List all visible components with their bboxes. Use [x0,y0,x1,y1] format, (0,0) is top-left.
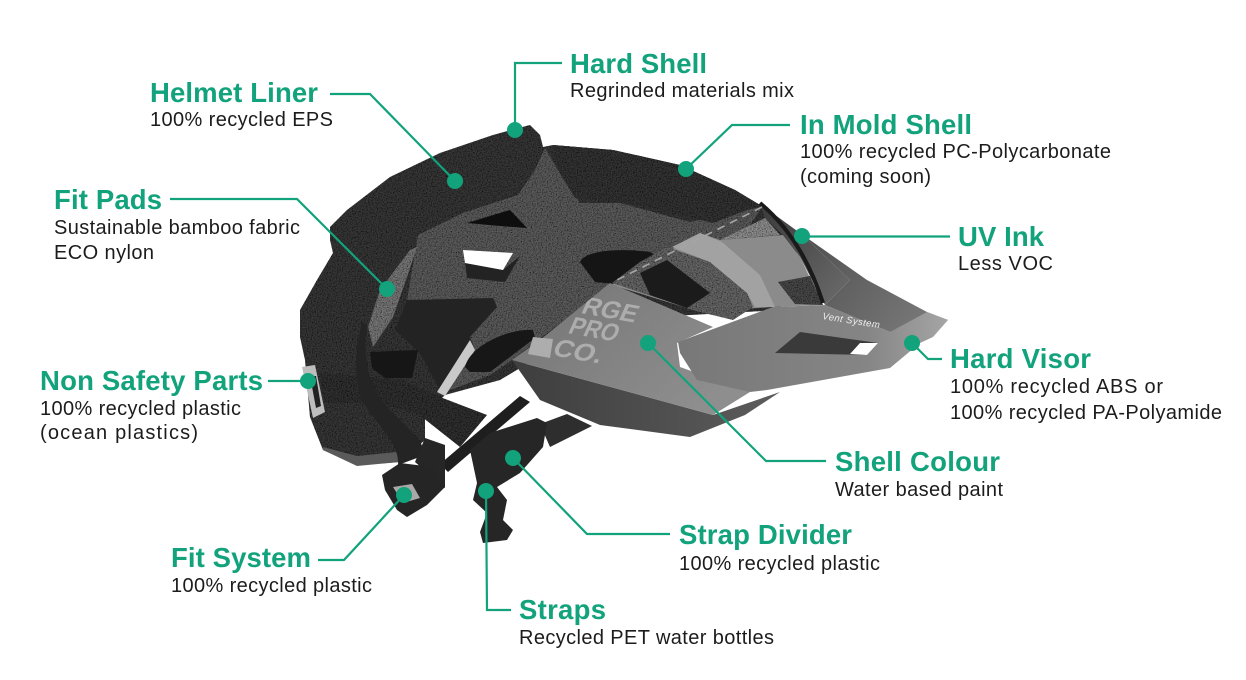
dashed cut line [615,207,762,281]
dot [379,281,395,297]
callout: Fit System [171,487,412,597]
visor inner window [760,204,850,305]
dot [505,450,521,466]
leader line [802,235,950,238]
through vent dark [465,256,520,282]
shell graphic lettering [554,298,640,363]
rear adjuster cable [356,322,425,465]
fit bracket [415,438,445,488]
dot [640,335,656,351]
helmet rear and liner body [300,125,800,465]
foam patch right [778,276,823,305]
callout: UV Ink [794,221,1053,275]
dot [794,228,810,244]
leader line [513,458,670,534]
side strap right [540,414,592,447]
callout: Shell Colour [640,335,1003,501]
shell colour panel [512,283,750,415]
helmet illustration [300,125,948,543]
heading: Non Safety Parts [40,365,263,396]
leader line [515,63,562,130]
callout: In Mold Shell [678,109,1111,188]
shell graphic lettering: RGE [578,293,643,328]
shell graphic block [528,337,553,358]
leader line [486,491,511,610]
foam patch under visor [720,218,780,240]
forehead pad [580,250,668,285]
heading: Hard Shell [570,48,707,79]
description: 100% recycled plastic [679,553,880,575]
through vent white [463,250,513,270]
side pad [465,330,535,372]
visor backing panel [612,233,823,312]
inner EPS foam [407,148,762,392]
rear vent [370,350,418,378]
description: Sustainable bamboo fabric [54,217,300,239]
description: Regrinded materials mix [570,80,794,102]
upper vent [467,210,527,228]
dark fit fabric [395,298,497,390]
description: 100% recycled plastic [40,398,241,420]
dot [678,161,694,177]
description: Recycled PET water bottles [519,627,774,649]
dot [396,487,412,503]
description: 100% recycled ABS or [950,376,1163,398]
foam ring around vent [612,247,753,320]
shell graphic lettering: PRO [565,313,624,347]
callout: Hard Shell [507,48,794,138]
leader line [330,94,455,181]
fit dial highlight [393,484,420,503]
description line 2: ECO nylon [54,242,154,264]
dark front liner pad [553,145,760,223]
description: 100% recycled EPS [150,109,333,131]
dot [478,483,494,499]
description: 100% recycled plastic [171,575,372,597]
heading: Strap Divider [679,519,852,550]
leader line [170,199,387,289]
rear slider buckle [302,365,325,418]
dot [904,335,920,351]
description line 2: (ocean plastics) [40,422,198,444]
warning label [437,340,475,396]
callout: Strap Divider [505,450,880,575]
thin strap [440,396,530,472]
rear lower shell edge [323,447,400,466]
description: Water based paint [835,479,1003,501]
heading: In Mold Shell [800,109,972,140]
visor window gap [850,343,878,355]
heading: Hard Visor [950,343,1091,374]
heading: Straps [519,594,606,625]
rear slider slot [310,376,321,408]
shell vent pad [640,260,710,308]
dot [447,173,463,189]
leader line [318,495,404,560]
visor window [775,332,878,355]
leader line [912,343,942,359]
callout: Helmet Liner [150,77,463,189]
callout: Hard Visor [904,335,1222,424]
visor peak [800,233,948,332]
shell lower band [512,360,780,437]
strap divider buckle [470,418,547,543]
shell graphic lettering: CO. [549,335,608,369]
heading: Shell Colour [835,446,1000,477]
heading: Helmet Liner [150,77,318,108]
description: 100% recycled PC-Polycarbonate [800,141,1111,163]
callout: Non Safety Parts [40,365,316,444]
description: Less VOC [958,253,1053,275]
heading: UV Ink [958,221,1045,252]
fit system dial [382,463,445,517]
description line 2: 100% recycled PA-Polyamide [950,402,1222,424]
visor dark edge [760,203,823,303]
leader line [268,380,308,382]
dot [507,122,523,138]
main strap [320,373,487,447]
visor logo: Vent System [822,311,881,331]
visor front [678,305,948,392]
leader line [648,343,826,461]
light shell band [672,233,775,307]
callout: Fit Pads [54,184,395,297]
leader line [686,125,790,169]
dot [300,373,316,389]
callout: Straps [478,483,774,649]
description line 2: (coming soon) [800,166,931,188]
fit pad side strip [368,247,417,347]
heading: Fit Pads [54,184,162,215]
heading: Fit System [171,542,311,573]
